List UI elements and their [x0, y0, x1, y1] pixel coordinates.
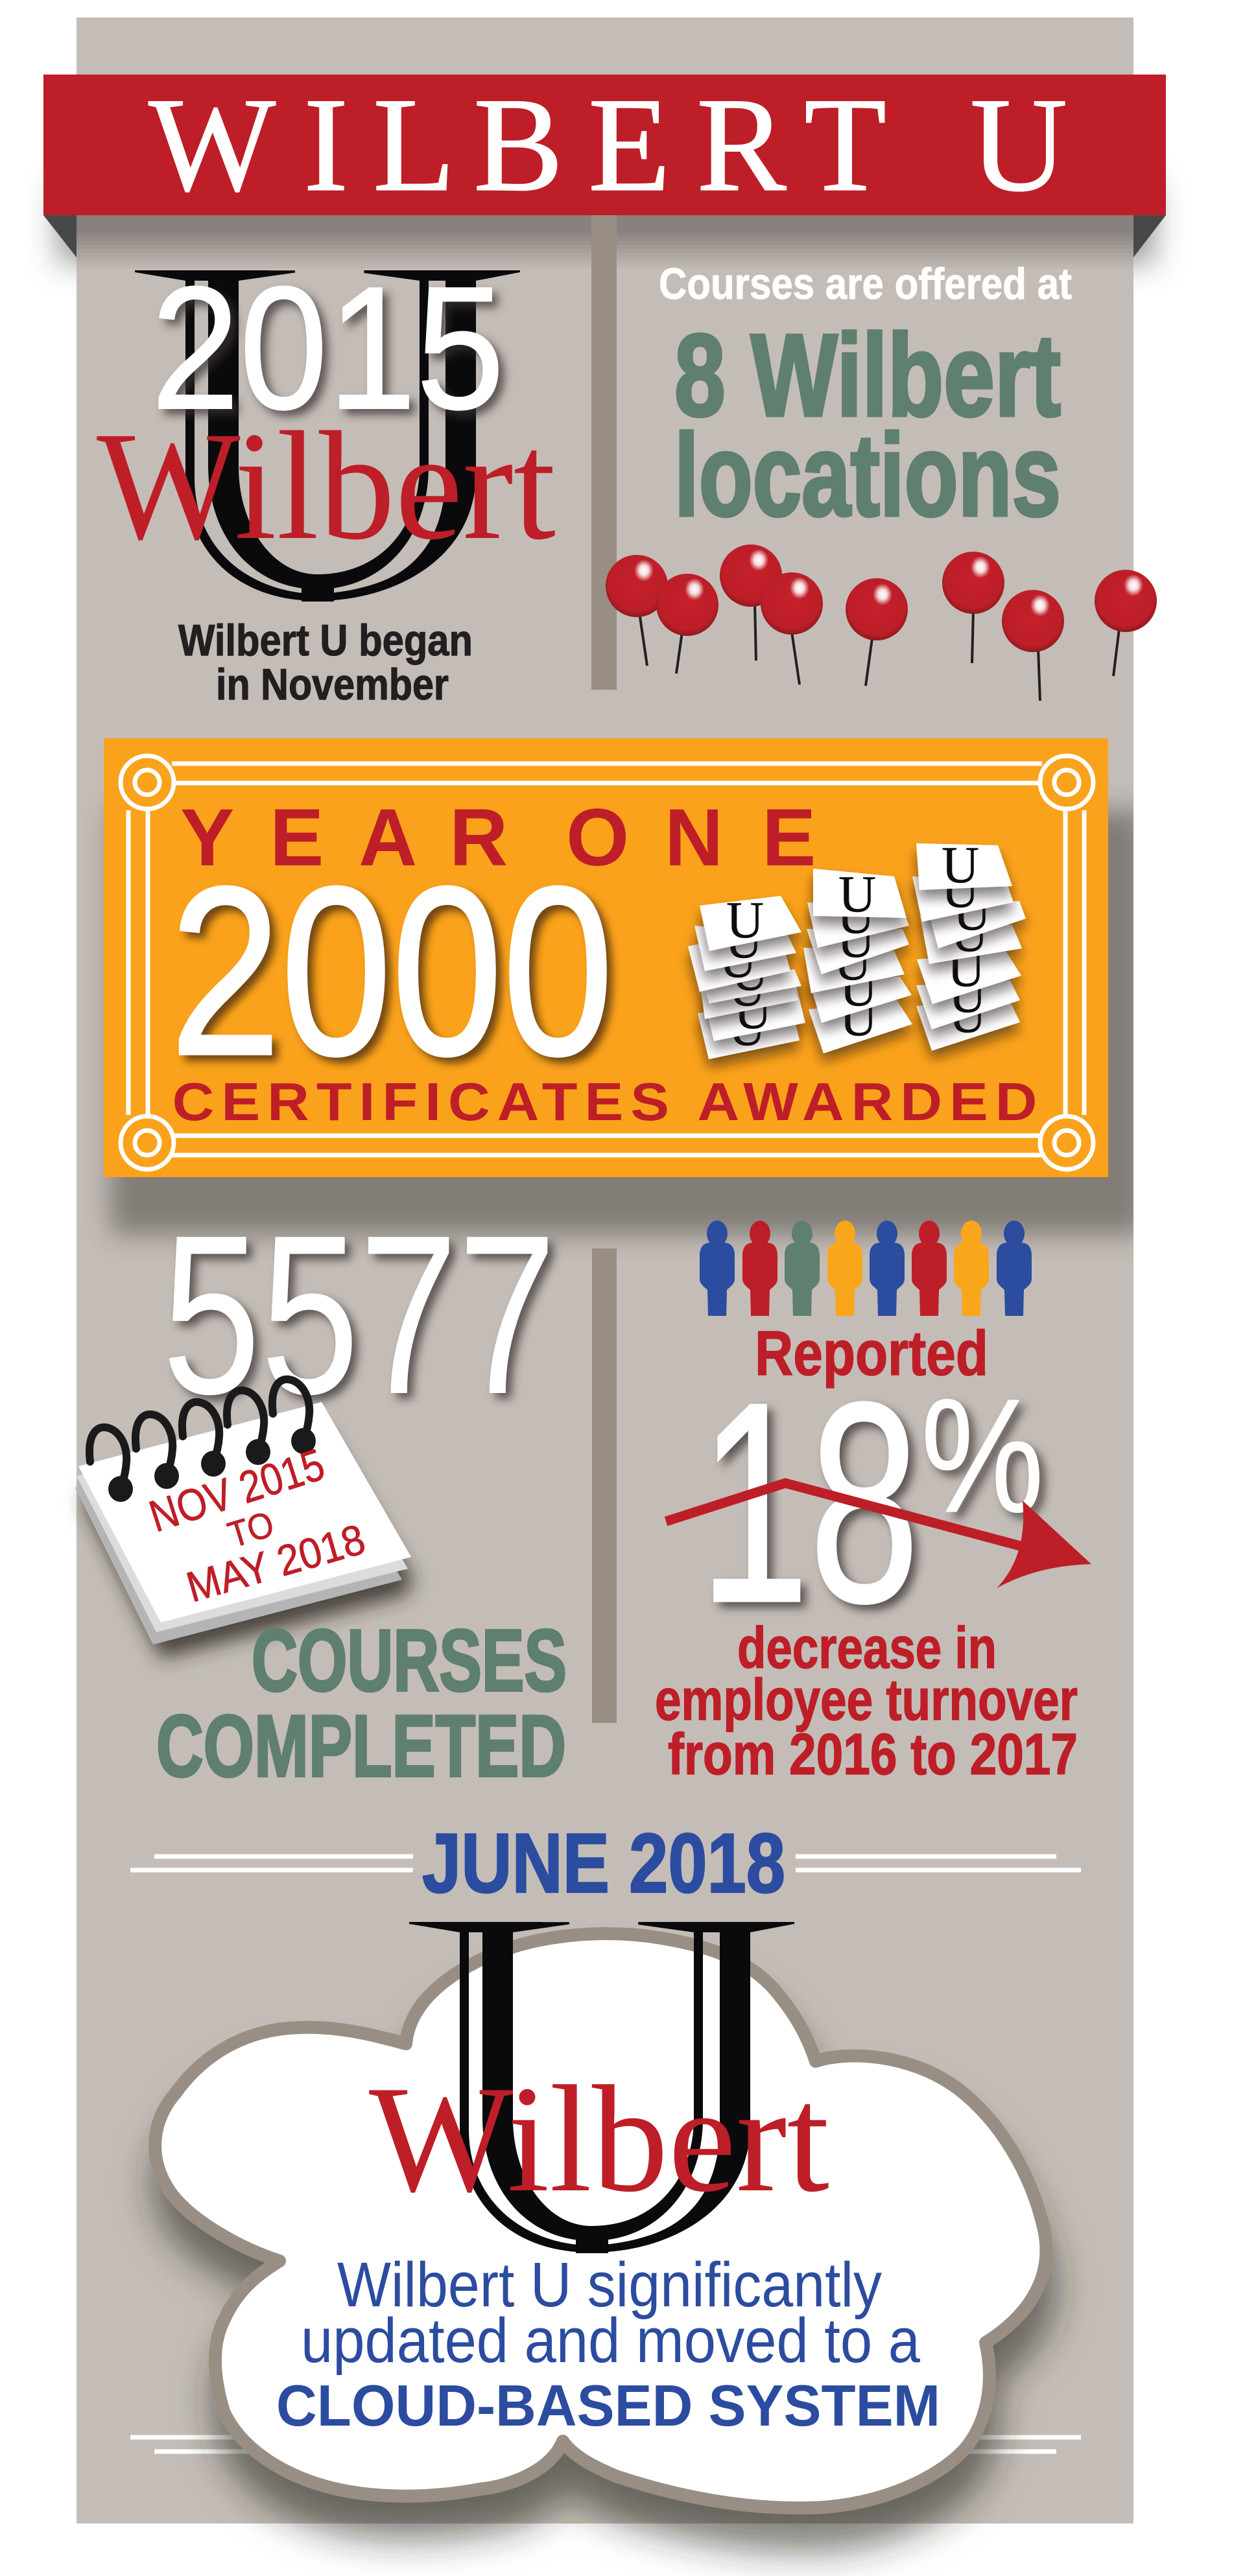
icon: certificate stack 1: U	[726, 892, 764, 949]
text: decrease in employee turnover: from 2016 to 2017	[668, 1722, 1078, 1787]
icon: certificate stack 1: U	[728, 1000, 766, 1057]
icon: certificate stack 3: U	[942, 861, 979, 919]
icons: eight map pins	[606, 544, 1157, 701]
text: cloud update message: CLOUD-BASED SYSTEM	[276, 2374, 940, 2439]
text: cloud update message	[276, 2249, 940, 2439]
cloud shape	[155, 1934, 1046, 2508]
calendar dates: NOV 2015	[143, 1439, 330, 1541]
icon: certificate stack 1: U	[719, 931, 757, 989]
icon: certificate stack 3	[912, 837, 1026, 1051]
panel: year one certificates	[104, 738, 1108, 1177]
icon: certificate stack 3: U	[951, 906, 988, 963]
icon: certificate stack 2: U	[837, 911, 875, 968]
calendar pages	[75, 1413, 408, 1645]
text: cloud update message: updated and moved to a	[301, 2305, 920, 2376]
text: 8 Wilbert locations	[674, 310, 1061, 541]
arrow: downward trend	[666, 1483, 1091, 1588]
text: courses offered: Courses are offered at	[659, 259, 1072, 309]
number 2000: 2000	[170, 837, 613, 1105]
icon: certificate stack 1: U	[728, 960, 766, 1017]
logo: Wilbert U 2015	[97, 270, 555, 602]
logo letter: U	[437, 1820, 756, 2340]
icon: certificate stack 1: U	[734, 983, 772, 1040]
logo letter	[409, 1922, 794, 2253]
calendar dates: MAY 2018	[181, 1515, 370, 1611]
text: began in November: in November	[216, 660, 449, 709]
text: 8 Wilbert locations: locations	[674, 410, 1061, 541]
number 5577: 5577	[162, 1188, 556, 1442]
binding rings	[89, 1379, 309, 1488]
banner shadow	[77, 215, 1133, 268]
icon: certificate stack 2: U	[838, 866, 876, 923]
icon: certificate stack 2: U	[840, 990, 877, 1047]
icon: certificate stack 3: U	[949, 987, 986, 1044]
text: courses completed	[156, 1611, 567, 1795]
calendar dates: TO	[223, 1503, 278, 1555]
icon: certificate stack 2	[803, 866, 912, 1053]
icon: calendar	[75, 1379, 411, 1645]
icon: certificate stack 2: U	[834, 934, 872, 991]
logo letter: U	[117, 158, 538, 701]
icon: certificate stack 1: U	[725, 912, 763, 969]
icon: certificate stack 3: U	[942, 837, 979, 894]
logo word: Wilbert	[97, 399, 556, 572]
text: reported: Reported	[755, 1318, 988, 1388]
title banner	[43, 75, 1166, 215]
text: 8 Wilbert locations: 8 Wilbert	[674, 310, 1061, 441]
banner fold left	[43, 215, 77, 257]
text: courses completed: COMPLETED	[156, 1697, 566, 1795]
text: began in November	[178, 616, 473, 709]
logo word: Wilbert	[369, 2055, 829, 2224]
icon: certificate stack 1: U	[731, 944, 768, 1001]
title: WILBERT U	[148, 70, 1067, 219]
logo letter: U	[391, 1810, 812, 2352]
text: decrease in employee turnover	[655, 1616, 1078, 1787]
icon: certificate stack 2: U	[837, 887, 875, 944]
logo letter	[135, 270, 520, 602]
year 2015: 2015	[151, 251, 504, 446]
text: decrease in employee turnover: decrease in	[737, 1616, 997, 1681]
orange background	[104, 738, 1108, 1177]
icon: certificate stack 3: U	[947, 941, 985, 998]
icon: certificate stack 3: U	[949, 966, 986, 1024]
banner fold right	[1133, 215, 1166, 257]
heading: June 2018: JUNE 2018	[422, 1816, 785, 1910]
icon: row of eight people	[700, 1221, 1032, 1316]
ring holes	[108, 1428, 316, 1502]
icon: certificate stack 1	[688, 892, 805, 1059]
heading rules	[130, 1856, 1081, 2452]
divider: top section	[591, 214, 617, 690]
divider: middle section	[592, 1248, 617, 1723]
text: began in November: Wilbert U began	[178, 616, 473, 665]
ornamental frame	[121, 756, 1093, 1169]
calendar dates	[143, 1439, 370, 1611]
text: decrease in employee turnover: employee turnover	[655, 1668, 1078, 1733]
caption: certificates awarded: CERTIFICATES AWARDED	[172, 1072, 1037, 1132]
text: courses completed: COURSES	[252, 1611, 567, 1709]
icon: certificate stack 3: U	[953, 884, 991, 941]
heading: year one: YEAR ONE	[180, 793, 816, 883]
logo letter: U	[163, 168, 482, 688]
page cover	[78, 1402, 411, 1622]
logo: Wilbert U in cloud	[369, 1922, 829, 2253]
number 18 percent: 18	[699, 1344, 919, 1662]
icon: certificate stack 2: U	[840, 960, 877, 1017]
text: cloud update message: Wilbert U significantly	[337, 2249, 882, 2320]
number 18 percent: %	[921, 1365, 1044, 1546]
